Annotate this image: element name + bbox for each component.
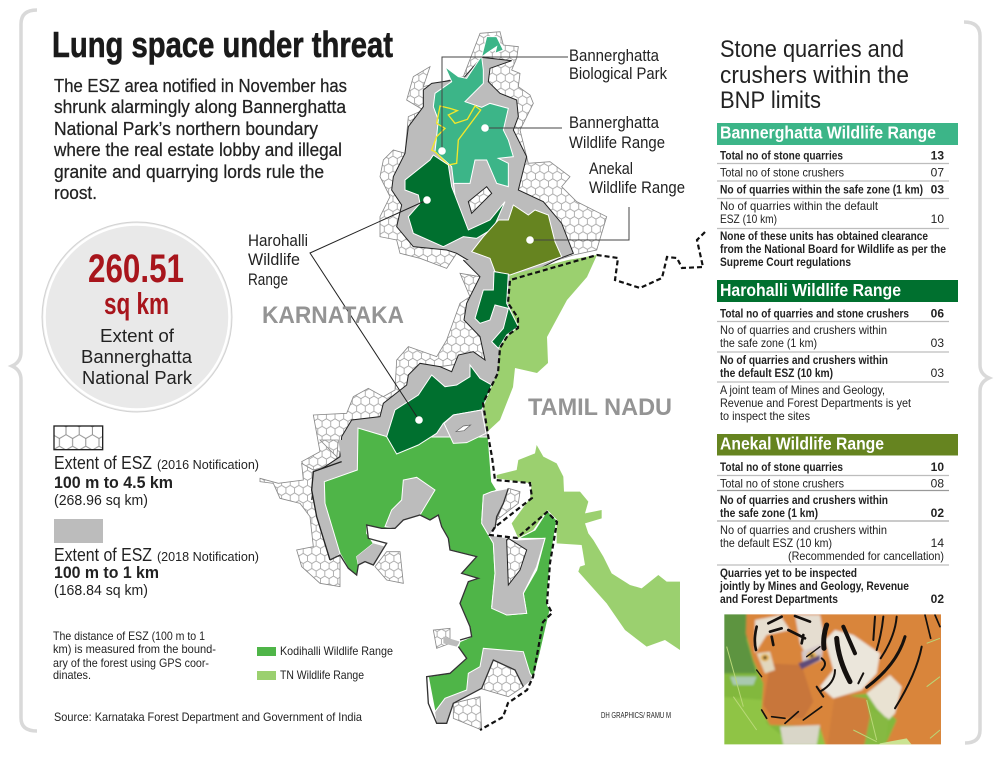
map: 2018 ESZ grey zones xyxy=(312,57,573,723)
panel: Bannerghatta Wildlife Range: 13 xyxy=(931,148,944,162)
panel: Harohalli Wildlife Range xyxy=(717,280,958,423)
label: Bannerghatta Wildlife Range: Bannerghatta xyxy=(569,113,659,132)
panel: Bannerghatta Wildlife Range: ESZ (10 km) xyxy=(720,212,777,226)
panel: Harohalli Wildlife Range: A joint team of Mines and Geology, xyxy=(720,383,885,397)
map: Bannerghatta wildlife range xyxy=(432,37,513,213)
panel: Harohalli Wildlife Range: 03 xyxy=(931,366,944,380)
panel: Harohalli Wildlife Range: 06 xyxy=(931,306,944,320)
ESZ distance note: dinates. xyxy=(53,668,91,682)
label: Karnataka: KARNATAKA xyxy=(262,302,404,329)
panel: Bannerghatta Wildlife Range xyxy=(717,122,958,269)
panel: Anekal Wildlife Range: Quarries yet to be inspected xyxy=(720,566,857,580)
right column heading: crushers within the xyxy=(720,62,909,89)
right column heading: BNP limits xyxy=(720,87,821,114)
ESZ distance note: ary of the forest using GPS coor- xyxy=(53,656,209,670)
legend: ESZ 2018: 100 m to 1 km xyxy=(54,564,159,582)
panel: Bannerghatta Wildlife Range: from the National Board for Wildlife as per the xyxy=(720,242,946,256)
panel heading: Harohalli: Harohalli Wildlife Range xyxy=(720,280,901,300)
panel heading: Bannerghatta: Bannerghatta Wildlife Range xyxy=(720,122,936,142)
panel: Anekal Wildlife Range: No of quarries and crushers within xyxy=(720,523,887,537)
right column heading xyxy=(720,36,909,114)
park extent circle: National Park xyxy=(82,368,193,388)
legend: ESZ 2016 xyxy=(54,426,259,509)
right brace xyxy=(964,22,989,743)
panel: Anekal Wildlife Range: 14 xyxy=(931,536,944,550)
map: Kodihalli wildlife range xyxy=(324,428,557,723)
park extent circle xyxy=(42,222,232,412)
legend: Kodihalli range: Kodihalli Wildlife Range xyxy=(280,644,393,658)
legend: TN range: TN Wildlife Range xyxy=(280,668,364,682)
label: Anekal Wildlife Range: Anekal xyxy=(589,159,633,178)
map: state boundary dashed line xyxy=(480,232,705,730)
legend: ESZ 2016: (2016 Notification) xyxy=(157,458,259,472)
panel: Anekal Wildlife Range: (Recommended for cancellation) xyxy=(788,549,944,563)
label: Bannerghatta Biological Park: Bannerghatta xyxy=(569,46,659,65)
map: 2016 ESZ hex zones xyxy=(260,32,607,730)
panel: Bannerghatta Wildlife Range: 03 xyxy=(931,182,944,196)
panel: Harohalli Wildlife Range: No of quarries and crushers within xyxy=(720,353,888,367)
panel: Bannerghatta Wildlife Range: 10 xyxy=(931,212,944,226)
label: Bannerghatta Biological Park xyxy=(569,46,667,83)
intro paragraph: where the real estate lobby and illegal xyxy=(53,139,342,160)
ESZ distance note: The distance of ESZ (100 m to 1 xyxy=(53,629,205,643)
panel: Anekal Wildlife Range xyxy=(717,434,958,606)
left brace xyxy=(12,10,37,731)
panel: Anekal Wildlife Range: Total no of stone quarries xyxy=(720,460,843,474)
label: Bannerghatta Biological Park: Biological Park xyxy=(569,64,667,83)
park extent circle: 260.51 xyxy=(88,247,184,291)
map xyxy=(260,32,705,730)
intro paragraph: The ESZ area notified in November has xyxy=(54,75,347,96)
label: Anekal Wildlife Range xyxy=(589,159,685,197)
legend: ESZ 2018: Extent of ESZ xyxy=(54,545,152,565)
source line: Source: Karnataka Forest Department and Government of India xyxy=(54,710,362,724)
map: Harohalli range central xyxy=(387,272,518,454)
panel: Harohalli Wildlife Range: the safe zone (1 km) xyxy=(720,336,817,350)
legend: ESZ 2016: (268.96 sq km) xyxy=(54,493,148,509)
label: Harohalli Wildlife Range xyxy=(248,231,308,289)
intro paragraph: shrunk alarmingly along Bannerghatta xyxy=(54,96,347,117)
park extent circle: Extent of xyxy=(100,326,175,346)
label: Harohalli Wildlife Range: Wildlife xyxy=(248,250,300,269)
legend: ESZ 2018: (168.84 sq km) xyxy=(54,583,148,599)
label: Anekal Wildlife Range: Wildlife Range xyxy=(589,178,685,197)
panel: Bannerghatta Wildlife Range: 07 xyxy=(931,166,944,180)
panel: Bannerghatta Wildlife Range: None of these units has obtained clearance xyxy=(720,229,928,243)
intro paragraph: National Park’s northern boundary xyxy=(54,118,319,139)
intro paragraph xyxy=(53,75,347,203)
right column heading: Stone quarries and xyxy=(720,36,904,63)
intro paragraph: roost. xyxy=(54,182,97,203)
label: Bannerghatta Wildlife Range: Wildlife Range xyxy=(569,133,665,152)
panel: Anekal Wildlife Range: the default ESZ (10 km) xyxy=(720,536,832,550)
legend: ESZ 2018 xyxy=(54,519,259,599)
intro paragraph: granite and quarrying lords rule the xyxy=(54,161,324,182)
label: Harohalli Wildlife Range: Range xyxy=(248,270,288,289)
panel: Anekal Wildlife Range: 10 xyxy=(931,460,944,474)
panel: Anekal Wildlife Range: 02 xyxy=(931,506,944,520)
panel: Bannerghatta Wildlife Range: No of quarries within the default xyxy=(720,199,879,213)
legend: ESZ 2016: 100 m to 4.5 km xyxy=(54,474,173,492)
panel: Anekal Wildlife Range: Total no of stone crushers xyxy=(720,476,844,490)
panel heading: Anekal: Anekal Wildlife Range xyxy=(720,434,884,454)
panel heading: Anekal xyxy=(717,434,958,456)
ESZ distance note xyxy=(53,629,216,682)
tiger illustration xyxy=(724,614,941,744)
park extent circle: sq km xyxy=(104,286,169,321)
park extent circle: Bannerghatta xyxy=(81,347,193,367)
legend: ESZ 2016: Extent of ESZ xyxy=(54,453,152,473)
panel: Anekal Wildlife Range: jointly by Mines and Geology, Revenue xyxy=(719,579,909,593)
panel: Anekal Wildlife Range: 02 xyxy=(931,592,944,606)
map: Anekal range xyxy=(472,205,562,275)
legend: ESZ 2018: (2018 Notification) xyxy=(157,550,259,564)
panel: Harohalli Wildlife Range: 03 xyxy=(931,336,944,350)
panel: Harohalli Wildlife Range: Total no of quarries and stone crushers xyxy=(720,306,909,320)
label: Tamil Nadu: TAMIL NADU xyxy=(528,394,672,421)
panel: Harohalli Wildlife Range: the default ESZ (10 km) xyxy=(720,366,833,380)
panel: Anekal Wildlife Range: the safe zone (1 km) xyxy=(720,506,818,520)
panel: Anekal Wildlife Range: 08 xyxy=(931,476,944,490)
panel: Bannerghatta Wildlife Range: Total no of stone quarries xyxy=(720,148,843,162)
panel: Harohalli Wildlife Range: No of quarries and crushers within xyxy=(720,323,887,337)
title: Lung space under threat xyxy=(52,24,393,65)
ESZ distance note: km) is measured from the bound- xyxy=(53,642,216,656)
map: TN wildlife range xyxy=(483,255,680,650)
map: leader lines and dots xyxy=(310,57,629,424)
panel: Bannerghatta Wildlife Range: Supreme Court regulations xyxy=(720,255,851,269)
map: biological park outline xyxy=(432,106,481,165)
label: Harohalli Wildlife Range: Harohalli xyxy=(248,231,308,250)
panel: Anekal Wildlife Range: and Forest Departments xyxy=(720,592,838,606)
panel: Anekal Wildlife Range: No of quarries and crushers within xyxy=(720,493,888,507)
panel: Bannerghatta Wildlife Range: Total no of stone crushers xyxy=(720,166,844,180)
panel: Harohalli Wildlife Range: to inspect the sites xyxy=(720,409,810,423)
panel: Bannerghatta Wildlife Range: No of quarries within the safe zone (1 km) xyxy=(720,182,923,196)
credit: DH GRAPHICS/ RAMU M xyxy=(601,710,671,720)
map: Harohalli range north xyxy=(405,155,505,247)
label: Bannerghatta Wildlife Range xyxy=(569,113,665,152)
panel: Harohalli Wildlife Range: Revenue and Forest Departments is yet xyxy=(720,396,912,410)
